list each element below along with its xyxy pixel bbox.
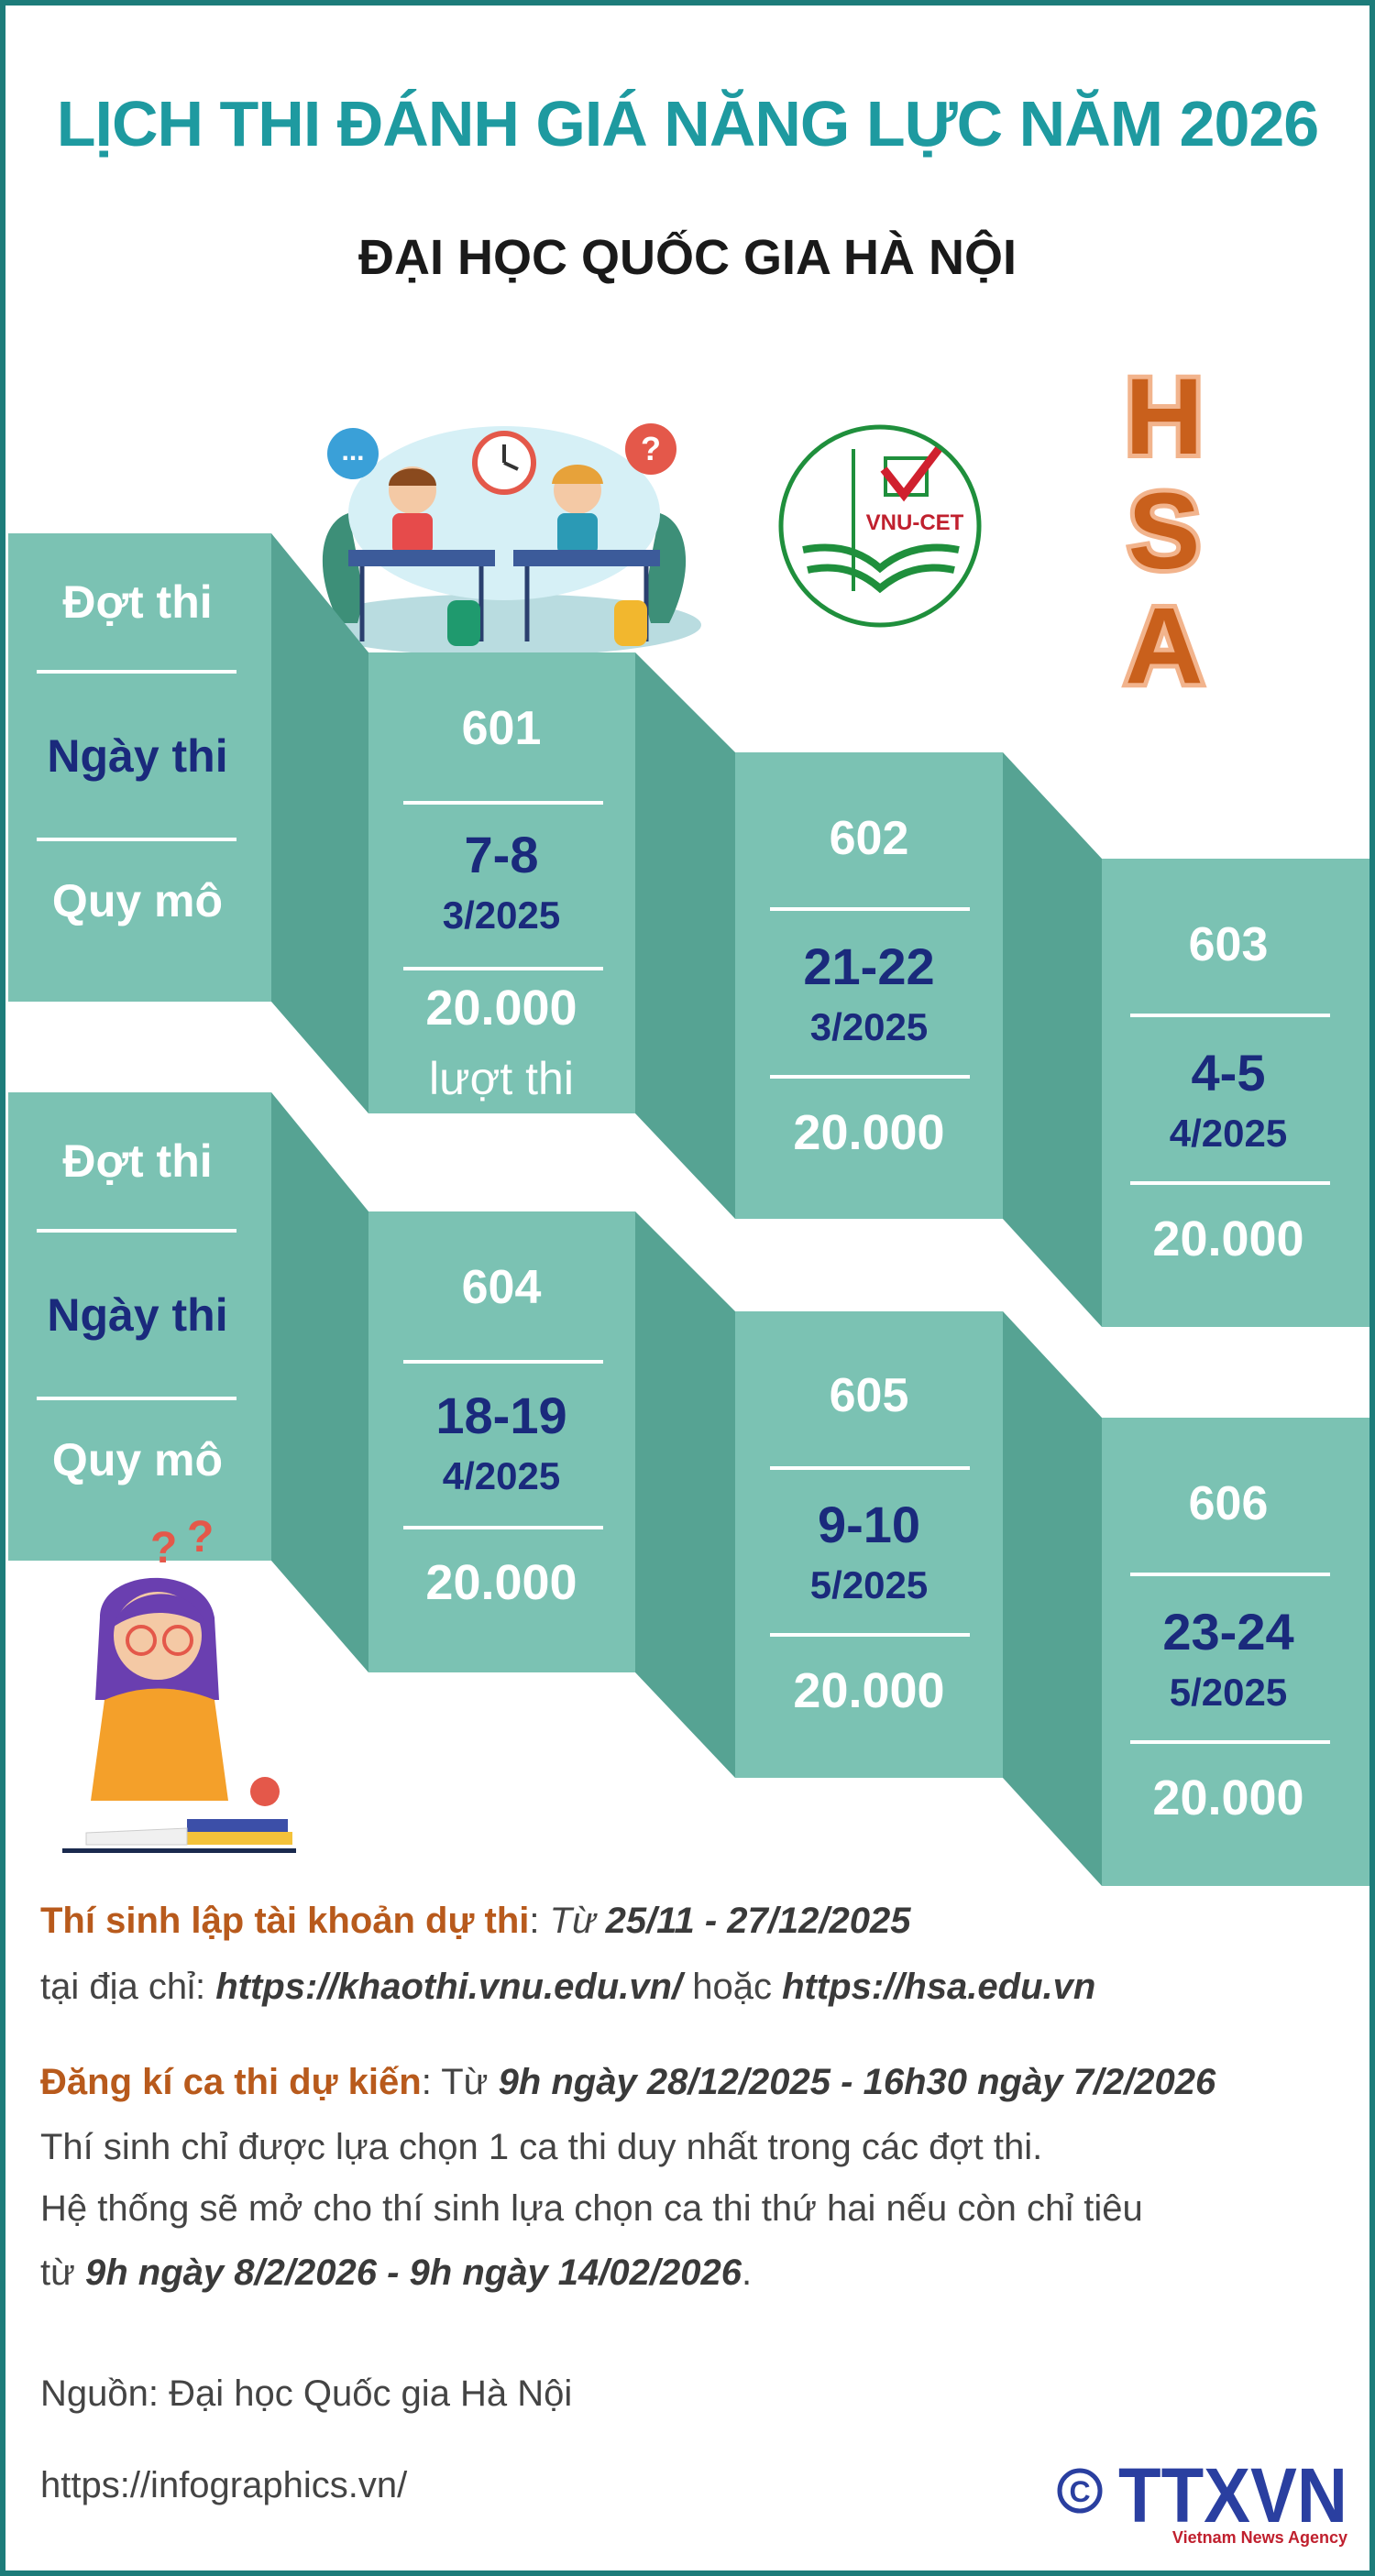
row 1 panels xyxy=(8,533,1370,1327)
row labels 1: Ngày thi xyxy=(47,730,228,782)
subtitle: ĐẠI HỌC QUỐC GIA HÀ NỘI xyxy=(358,230,1017,285)
row labels 1: Đợt thi xyxy=(62,576,213,628)
column 604: 20.000 xyxy=(425,1555,578,1610)
row labels 2: Quy mô xyxy=(52,1434,223,1485)
column 606 xyxy=(1130,1477,1330,1825)
column 604: 18-19 xyxy=(435,1387,567,1444)
logo: HSA letters: A xyxy=(1125,586,1204,706)
column 606: 606 xyxy=(1189,1477,1268,1530)
footer text: note 1: Thí sinh chỉ được lựa chọn 1 ca thi duy nhất trong các đợt thi. xyxy=(40,2127,1042,2167)
column 606: 5/2025 xyxy=(1170,1671,1287,1714)
footer text: registration: Đăng kí ca thi dự kiến: Từ 9h ngày 28/12/2025 - 16h30 ngày 7/2/2026 xyxy=(40,2062,1216,2102)
column 601 xyxy=(403,702,603,1104)
column 606: 23-24 xyxy=(1162,1603,1294,1661)
column 605: 605 xyxy=(830,1369,908,1422)
logo: TTXVN: Vietnam News Agency xyxy=(1172,2528,1348,2547)
row labels 2: Đợt thi xyxy=(62,1135,213,1187)
row labels 2 xyxy=(37,1135,236,1485)
logo: VNU-CET xyxy=(779,425,981,627)
illustration: thinking girl xyxy=(62,1517,296,1853)
column 602: 602 xyxy=(830,812,908,865)
column 603: 603 xyxy=(1189,918,1268,971)
column 601: 601 xyxy=(462,702,541,755)
website: https://infographics.vn/ xyxy=(40,2465,407,2505)
title: LỊCH THI ĐÁNH GIÁ NĂNG LỰC NĂM 2026 xyxy=(57,88,1318,159)
column 601: 3/2025 xyxy=(443,893,560,937)
column 601: 7-8 xyxy=(465,826,538,883)
footer text: note 3: từ 9h ngày 8/2/2026 - 9h ngày 14/02/2026. xyxy=(40,2253,752,2293)
column 603: 4/2025 xyxy=(1170,1112,1287,1155)
footer text: account creation: Thí sinh lập tài khoản dự thi: Từ 25/11 - 27/12/2025 xyxy=(40,1901,910,1941)
column 603 xyxy=(1130,918,1330,1266)
logo: TTXVN: C xyxy=(1069,2475,1091,2508)
column 606: 20.000 xyxy=(1152,1770,1304,1825)
column 601: 20.000 xyxy=(425,981,578,1036)
illustration: students at desks: ... xyxy=(341,436,365,466)
row labels 2: Ngày thi xyxy=(47,1289,228,1341)
logo: HSA letters: S xyxy=(1128,471,1200,592)
source: Nguồn: Đại học Quốc gia Hà Nội xyxy=(40,2373,572,2414)
footer text: note 2: Hệ thống sẽ mở cho thí sinh lựa chọn ca thi thứ hai nếu còn chỉ tiêu xyxy=(40,2188,1143,2229)
column 602: 3/2025 xyxy=(810,1005,928,1048)
column 603: 20.000 xyxy=(1152,1211,1304,1266)
column 602: 20.000 xyxy=(793,1105,945,1160)
column 602: 21-22 xyxy=(803,937,935,995)
column 605: 5/2025 xyxy=(810,1563,928,1606)
footer text: address: tại địa chỉ: https://khaothi.vnu.edu.vn/ hoặc https://hsa.edu.vn xyxy=(40,1967,1095,2007)
column 603: 4-5 xyxy=(1192,1044,1265,1102)
column 605 xyxy=(770,1369,970,1718)
logo: VNU-CET: VNU-CET xyxy=(866,510,964,535)
illustration: students at desks: ? xyxy=(641,430,661,467)
row labels 1: Quy mô xyxy=(52,875,223,926)
row 2 panels xyxy=(8,1092,1370,1886)
row labels 1 xyxy=(37,576,236,926)
column 601: lượt thi xyxy=(429,1053,574,1104)
column 605: 9-10 xyxy=(818,1496,920,1553)
column 604 xyxy=(403,1261,603,1610)
logo: HSA letters xyxy=(1121,357,1206,706)
illustration: students at desks xyxy=(323,423,701,652)
column 602 xyxy=(770,812,970,1160)
column 604: 604 xyxy=(462,1261,541,1314)
column 605: 20.000 xyxy=(793,1663,945,1718)
illustration: thinking girl: ? xyxy=(150,1524,177,1573)
column 604: 4/2025 xyxy=(443,1454,560,1497)
logo: HSA letters: H xyxy=(1125,357,1204,477)
